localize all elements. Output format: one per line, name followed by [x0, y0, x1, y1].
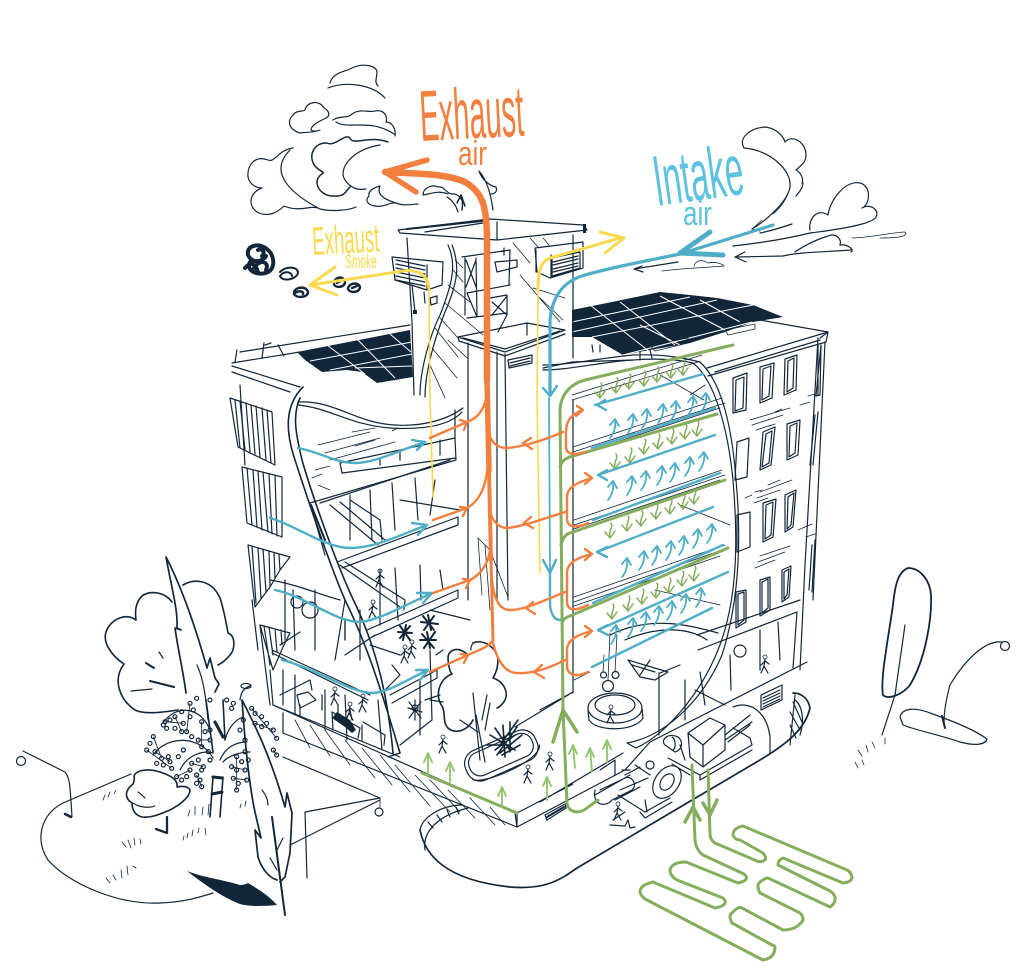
right loop 3 — [567, 549, 592, 609]
feather tree front — [242, 700, 292, 882]
small cloud right — [423, 186, 464, 203]
title: Exhaust smoke — [311, 217, 380, 273]
title: Exhaust air — [418, 72, 526, 173]
broadleaf tree — [105, 593, 178, 713]
left branches — [430, 395, 487, 438]
curved panel — [288, 387, 400, 753]
title: Intake air: air — [683, 195, 712, 233]
main trunk — [385, 172, 487, 380]
willow leaves — [145, 696, 279, 792]
text: Exhaust — [311, 217, 380, 264]
up arrows row 4 — [611, 625, 620, 644]
big cloud left — [248, 148, 356, 214]
right floor interior lines — [572, 355, 730, 735]
grass — [855, 738, 885, 768]
worker — [614, 802, 622, 820]
feather shadow — [187, 871, 277, 906]
lower tower box — [458, 323, 565, 600]
pump tank — [647, 760, 687, 804]
planter foliage — [487, 720, 522, 757]
floor 4 — [272, 620, 437, 720]
lamp — [1000, 642, 1010, 650]
right loop 2 — [567, 473, 592, 526]
tower hatching — [430, 238, 565, 398]
small arrows near chimney — [457, 195, 465, 210]
windows row 3 — [737, 490, 796, 552]
slab 1 — [310, 410, 456, 503]
tower roof — [398, 219, 587, 240]
willow branches — [153, 710, 250, 770]
willow trunk — [206, 700, 225, 817]
building left edge — [240, 385, 273, 705]
wavy upper slab — [298, 402, 463, 428]
lawn triangle — [283, 757, 380, 878]
street pavement — [420, 693, 810, 888]
right rows — [592, 374, 728, 667]
cloud small low — [662, 261, 724, 271]
cloud centre — [312, 137, 388, 196]
frame with cross bracing — [462, 248, 517, 332]
intake vent right — [535, 242, 583, 278]
supply arrows row 4 — [607, 604, 617, 619]
light green rising arrows — [424, 740, 611, 807]
branch ducts — [560, 414, 728, 623]
right building facade — [543, 332, 828, 748]
cloud large right — [733, 183, 877, 246]
exhaust vent left — [392, 257, 443, 290]
machine box — [688, 715, 752, 767]
right tree and lamp — [855, 568, 1010, 768]
meeting table — [280, 680, 322, 715]
text: Intake — [648, 130, 748, 222]
blue intake duct and arrows — [270, 225, 773, 693]
indoor plants — [398, 615, 438, 648]
roof lines — [707, 332, 828, 670]
text: Exhaust — [418, 72, 526, 157]
supply arrows row 3 — [605, 523, 615, 538]
supply arrows row 2 — [610, 454, 620, 469]
small cloud below — [367, 186, 418, 206]
clouds: exhaust air — [248, 65, 497, 214]
tower walls — [407, 235, 573, 395]
cloud mid right — [735, 235, 852, 262]
yellow exhaust smoke lines — [310, 232, 624, 573]
curved panel — [627, 362, 739, 748]
title: Exhaust smoke: Smoke — [345, 252, 377, 273]
title: Exhaust air: air — [458, 135, 487, 173]
plaza tree and planter — [430, 642, 769, 787]
windows row 2 — [735, 420, 800, 480]
core lines — [543, 360, 633, 693]
willow tree — [145, 684, 279, 817]
up arrows row 1 — [610, 419, 619, 438]
lamp left — [23, 751, 72, 817]
grass tufts — [103, 790, 246, 883]
right branches — [488, 430, 563, 449]
floor 2 — [312, 460, 460, 568]
feather tree — [882, 568, 931, 697]
louvre panel 1 — [230, 398, 275, 465]
brick marks — [745, 394, 815, 568]
platform lines — [515, 662, 807, 827]
main green duct — [560, 345, 733, 812]
street level green line — [422, 773, 517, 813]
up arrows row 3 — [622, 558, 631, 577]
left garden — [16, 557, 383, 915]
atrium fountain — [588, 633, 643, 729]
side downpipes — [809, 345, 821, 592]
cloud upper left — [289, 103, 329, 133]
right loop 4 — [567, 626, 592, 675]
louvre panel 4 — [260, 625, 290, 670]
base hatching — [273, 705, 517, 827]
planter — [460, 725, 544, 787]
right loop 1 — [566, 406, 585, 454]
tree trunk — [460, 693, 490, 762]
solar panels: left roof — [232, 325, 413, 383]
ground heat exchange pipe — [640, 765, 852, 960]
left rows — [298, 440, 425, 463]
windows row 1 — [733, 355, 797, 413]
main intake — [550, 225, 773, 393]
willow lamp — [240, 686, 250, 700]
people on floors — [376, 569, 384, 587]
supply arrows row 1 — [595, 383, 605, 398]
cloud upper middle — [333, 111, 395, 136]
louvre panel 3 — [248, 545, 290, 607]
solar panels: right roof — [572, 292, 828, 360]
up arrows row 2 — [608, 481, 617, 500]
tower — [392, 219, 633, 693]
floor 3 — [270, 562, 470, 660]
windows row 4 — [736, 566, 791, 628]
cloud top — [328, 65, 385, 98]
green supply ducts — [422, 345, 733, 813]
machinery vent — [761, 685, 782, 710]
small bush — [126, 770, 190, 817]
left curved panel and slabs — [230, 366, 470, 757]
orange exhaust trunk and branches — [385, 160, 592, 678]
cloud upper right — [742, 127, 806, 229]
ground floor glazing — [697, 600, 800, 690]
plaza and platform — [273, 662, 810, 888]
people on plaza — [439, 735, 447, 753]
feather tree back — [166, 557, 219, 693]
tree canopy — [438, 642, 506, 731]
clouds: intake air — [634, 127, 906, 272]
title: Intake air — [648, 130, 748, 233]
louvre panel 2 — [242, 467, 282, 537]
corner hatch — [790, 695, 802, 745]
curved roof — [543, 355, 700, 370]
lawn patch — [900, 709, 987, 744]
smoke scribbles — [245, 245, 360, 297]
garden ground outline — [41, 774, 213, 903]
